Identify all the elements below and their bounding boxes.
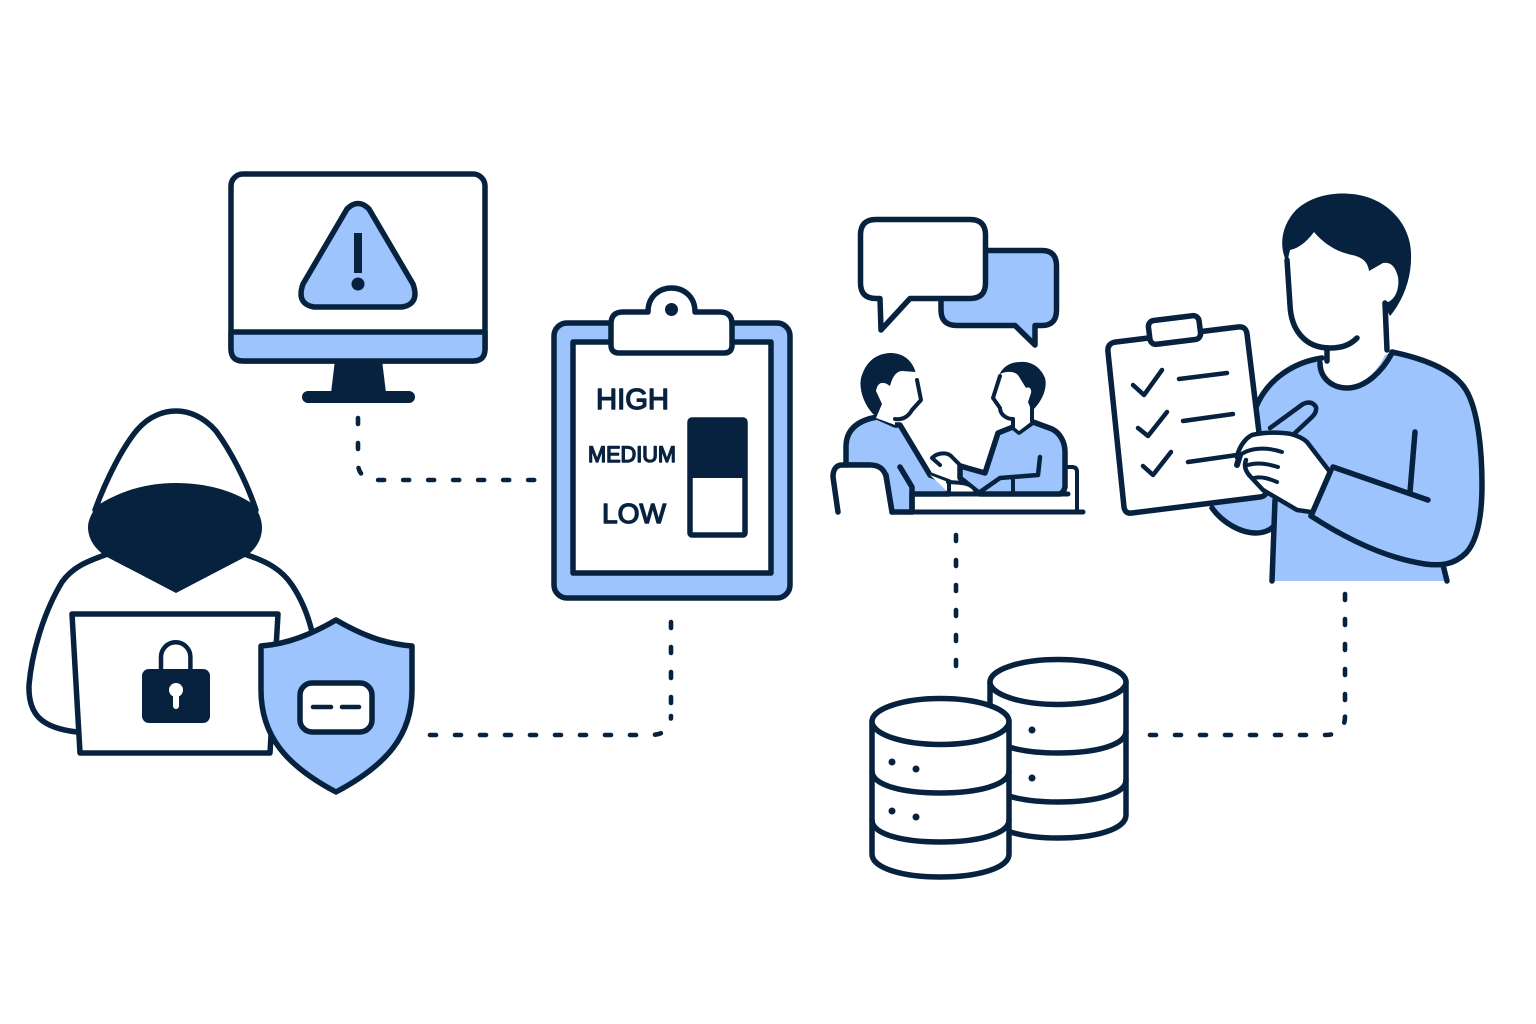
laptop	[72, 614, 278, 753]
left person body	[846, 417, 949, 512]
front database	[872, 698, 1009, 877]
fingers	[1237, 449, 1282, 482]
hand and forearm	[932, 453, 985, 473]
monitor screen	[231, 174, 485, 361]
icon: hooded hacker with laptop	[29, 411, 312, 753]
checklist lines	[1179, 373, 1237, 462]
icon: two people in meeting	[833, 353, 1083, 512]
hair	[1282, 193, 1411, 316]
risk level bar	[690, 420, 745, 535]
clipboard board	[554, 323, 790, 598]
back database	[990, 660, 1126, 838]
label: low: LOW	[602, 498, 667, 529]
check marks	[1133, 370, 1171, 475]
checklist board	[1108, 327, 1266, 513]
arrow: dashed connector shield to clipboard	[430, 622, 671, 735]
panel: risk level clipboard	[554, 288, 790, 598]
label: medium: MEDIUM	[588, 442, 676, 467]
monitor stand	[331, 360, 386, 393]
white speech bubble	[860, 220, 986, 330]
right person body	[960, 422, 1065, 494]
clipboard clip	[611, 288, 732, 353]
shield badge	[300, 683, 372, 732]
hood	[95, 411, 256, 510]
arrow: dashed connector meeting to databases	[954, 535, 958, 668]
cuff	[1311, 467, 1428, 516]
hand	[1237, 433, 1330, 512]
pen	[1270, 403, 1316, 433]
left person head	[860, 353, 921, 423]
shirt outline	[1320, 353, 1392, 388]
sleeve fold	[1410, 432, 1415, 492]
hacker body	[29, 555, 105, 732]
icon: speech bubbles	[860, 220, 1056, 345]
label: high: HIGH	[596, 384, 669, 416]
face outline	[1287, 260, 1357, 348]
right chair back	[1067, 467, 1077, 510]
neck and face	[1288, 262, 1386, 387]
icon: shield	[261, 620, 412, 792]
padlock	[161, 642, 190, 672]
warning triangle	[301, 204, 415, 307]
torso fill	[1212, 352, 1482, 581]
table	[913, 492, 1068, 496]
clipboard paper	[573, 342, 771, 573]
checklist clip	[1148, 315, 1201, 345]
icon: reviewer with checklist	[1108, 193, 1482, 581]
icon: stacked databases	[872, 660, 1126, 877]
blue speech bubble	[941, 250, 1056, 345]
right person head	[998, 362, 1046, 422]
chair	[833, 465, 892, 512]
arrow: dashed connector reviewer to databases	[1150, 594, 1345, 735]
icon: monitor with warning	[231, 174, 485, 403]
arrow: dashed connector monitor to clipboard	[358, 418, 538, 480]
